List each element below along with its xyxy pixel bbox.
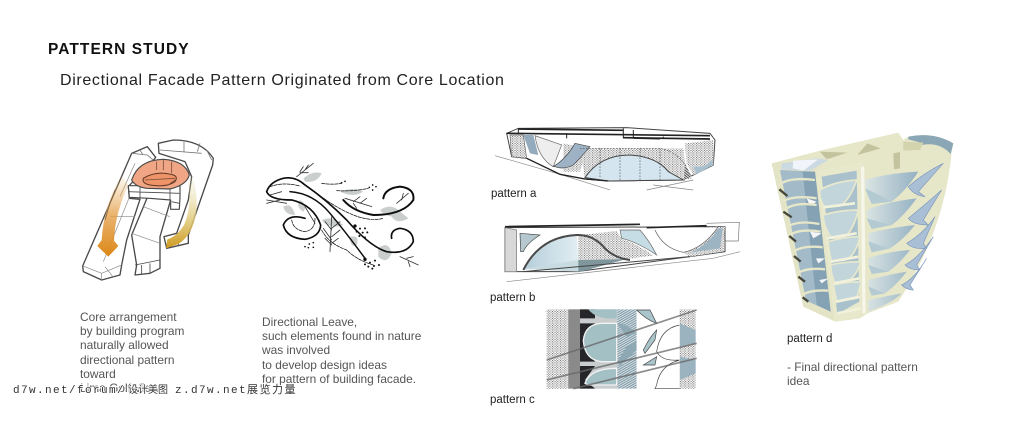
text: final pattern note: - Final directional pattern idea xyxy=(787,360,918,388)
subtitle: Directional Facade Pattern Originated from Core Location xyxy=(60,72,505,89)
pale leaves xyxy=(283,172,408,260)
image: pattern d tower rendering xyxy=(772,133,953,322)
label: pattern d: pattern d xyxy=(787,333,832,345)
label: pattern c: pattern c xyxy=(490,394,535,406)
tower right column xyxy=(865,163,943,312)
arrow: left orange xyxy=(97,175,128,257)
drawing: pattern c xyxy=(547,309,697,389)
icon: directional leaf ornament xyxy=(267,163,418,270)
watermark: 展览力量 xyxy=(247,385,297,397)
dot clusters xyxy=(304,180,380,270)
watermark xyxy=(13,382,297,397)
right wing xyxy=(158,140,213,248)
drawing: pattern a xyxy=(495,128,715,190)
arrow: right yellow xyxy=(166,177,197,248)
watermark: z.d7w.net xyxy=(175,385,247,397)
core ellipse xyxy=(132,159,189,189)
left wing xyxy=(83,147,156,280)
label: pattern a: pattern a xyxy=(491,188,536,200)
leaf sprigs xyxy=(267,163,418,267)
title: PATTERN STUDY xyxy=(48,41,190,58)
watermark: 设计美图 xyxy=(128,386,168,397)
middle leg xyxy=(132,195,171,275)
text: directional leave: Directional Leave, such elements found in nature was involved to develop design ideas for pattern of building facade. xyxy=(262,315,421,386)
drawing: pattern b xyxy=(505,222,740,282)
tower middle column xyxy=(817,162,864,322)
tower shell xyxy=(772,133,953,322)
tower left column xyxy=(772,158,834,320)
watermark: d7w.net/forum/ xyxy=(13,385,125,397)
label: pattern b: pattern b xyxy=(490,292,535,304)
image: pattern a and pattern b drawings xyxy=(495,128,740,282)
core base block xyxy=(128,186,180,209)
icon: core arrangement diagram xyxy=(83,140,213,280)
text: core arrangement: Core arrangement by building program naturally allowed directional pattern toward Lima Golf View xyxy=(80,310,184,395)
